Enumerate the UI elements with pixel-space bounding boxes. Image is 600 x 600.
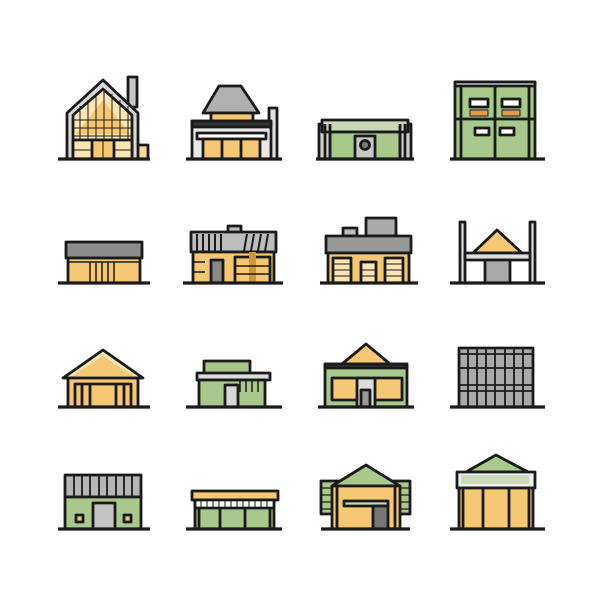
icon: warehouse with sheds [321, 465, 410, 529]
icon: flat garage [58, 242, 150, 283]
icon: green station [316, 120, 414, 159]
icon: green house with orange windows [318, 344, 414, 407]
icon: gabled glass house [58, 77, 150, 159]
icon: shop with rooftop units [320, 218, 418, 283]
icon: green modern house [186, 361, 282, 407]
icon: striped roof house [183, 226, 283, 283]
icon: green shop striped roof [58, 475, 150, 529]
icon: pavilion [450, 222, 545, 283]
icon: strip mall [186, 491, 282, 529]
icon: large hall [450, 455, 545, 529]
icon: gabled garage [58, 350, 150, 407]
icon: green tall building [450, 82, 545, 159]
icon: grid office [450, 348, 545, 407]
icon: pagoda-roof store [186, 86, 282, 159]
